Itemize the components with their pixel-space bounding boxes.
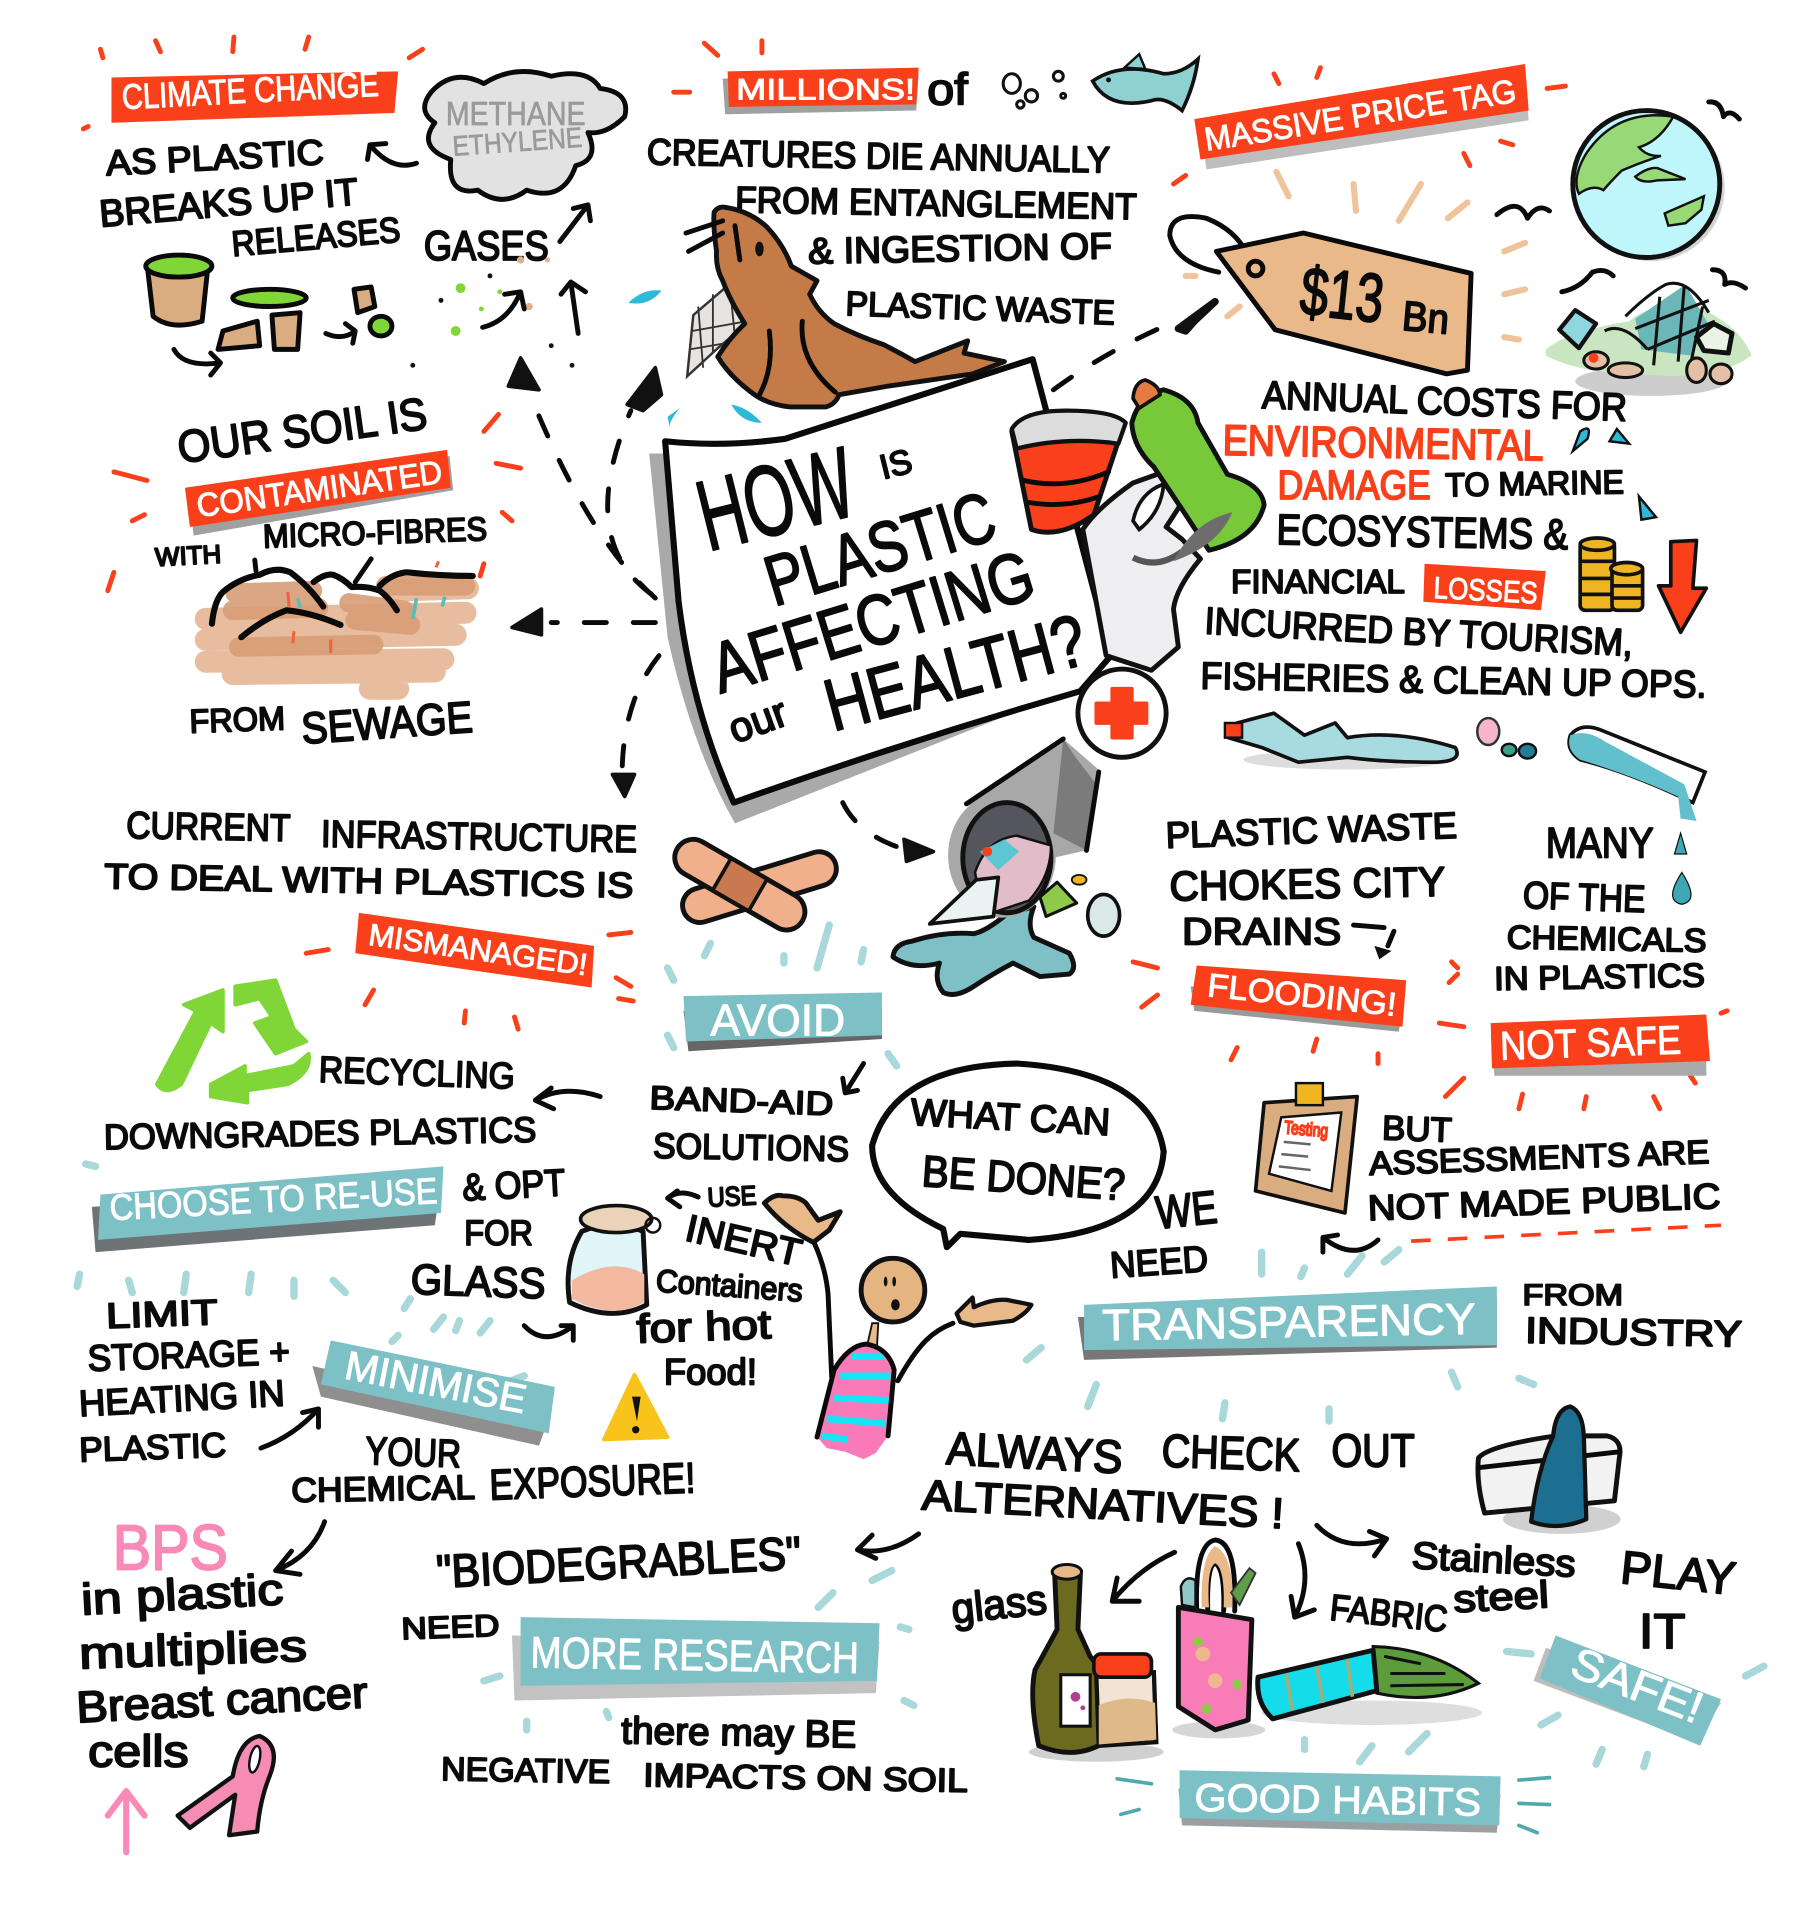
icon: fish and bubbles (1003, 54, 1198, 111)
panel: central title card (508, 358, 1264, 861)
icon: methane cloud (425, 72, 626, 199)
text: stainless steel (1411, 1535, 1577, 1621)
text: band-aid solutions: BAND-AID (649, 1080, 834, 1123)
icon: soil mound (206, 559, 473, 689)
tag: safe: SAFE! (1564, 1638, 1710, 1733)
text: limit storage and heating (78, 1292, 290, 1470)
arrow: pink up (108, 1791, 145, 1852)
icon: testing clipboard: Testing (1283, 1116, 1329, 1141)
icons: water drops (1573, 428, 1656, 520)
icon: plastic bag (1083, 462, 1200, 670)
text: annual costs: INCURRED BY TOURISM, (1204, 601, 1634, 665)
tag: more research (512, 1617, 879, 1700)
text: with micro-fibres: MICRO-FIBRES (262, 511, 488, 556)
text: of: of (927, 65, 969, 114)
tag: mismanaged: MISMANAGED! (367, 918, 590, 982)
text: in plastic multiplies breast cancer cells: in plastic (80, 1565, 284, 1625)
text: plastic waste chokes city drains: PLASTIC WASTE (1165, 805, 1458, 856)
text: with micro-fibres: WITH (154, 541, 222, 572)
icon: crossed plasters (668, 833, 841, 937)
arrow: limit to minimise (261, 1409, 318, 1448)
text: recycling downgrades plastics (104, 1049, 537, 1157)
arrow: center to infrastructure (612, 656, 659, 796)
panel: price tag (1053, 64, 1752, 821)
text: creatures die annually: CREATURES DIE ANNUALLY (647, 131, 1110, 180)
panel: alternatives (401, 1406, 1738, 1833)
text: we need (1109, 1181, 1220, 1286)
text: limit storage and heating: STORAGE + (87, 1331, 290, 1379)
panel: what can be done (764, 1064, 1742, 1459)
arrow: red down (1659, 540, 1706, 632)
icon: plastic waste pile (1546, 283, 1752, 396)
text: annual costs: FINANCIAL (1231, 564, 1405, 601)
icon: testing clipboard (1256, 1083, 1357, 1213)
text: glass: glass (949, 1576, 1049, 1632)
arrow: to stainless steel (1317, 1525, 1387, 1556)
text: recycling downgrades plastics: DOWNGRADES PLASTICS (104, 1110, 537, 1157)
text: creatures die annually: & INGESTION OF (808, 225, 1112, 272)
text: play it: IT (1639, 1605, 1685, 1659)
text: your chemical exposure (291, 1430, 696, 1510)
text: with micro-fibres (154, 511, 488, 572)
panel: drains and plasters (668, 739, 1721, 1252)
text: from sewage: SEWAGE (300, 693, 474, 754)
arrow: center to gases (508, 358, 655, 598)
text: from sewage: FROM (189, 700, 286, 741)
text: as plastic breaks up it releases gases: RELEASES (230, 210, 402, 264)
speech bubble: WHAT CAN (910, 1092, 1111, 1144)
icon: birds (1497, 102, 1746, 292)
icon: methane cloud: ETHYLENE (451, 121, 583, 162)
tag: massive price tag: MASSIVE PRICE TAG (1202, 73, 1519, 159)
text: opt for glass: FOR (464, 1213, 533, 1253)
heading: our soil is: OUR SOIL IS (174, 388, 430, 473)
arrow: center to drain pipe (843, 803, 933, 861)
arrow: to clipboard (1323, 1225, 1721, 1252)
text: creatures die annually: FROM ENTANGLEMENT (735, 179, 1137, 227)
title: how is plastic affecting our health: our (722, 688, 793, 752)
text: from industry (1523, 1279, 1742, 1355)
text: in plastic multiplies breast cancer cells: Breast cancer (75, 1668, 369, 1732)
text: use inert containers for hot food: INERT (681, 1208, 806, 1275)
text: your chemical exposure: CHEMICAL (291, 1469, 475, 1510)
arrow: center to seal (608, 368, 661, 594)
text: use inert containers for hot food (636, 1180, 806, 1392)
tag: avoid (684, 992, 882, 1051)
tag: flooding: FLOODING! (1206, 967, 1398, 1024)
text: from sewage (189, 693, 474, 754)
text: from industry: FROM (1523, 1279, 1623, 1312)
panel: climate change (98, 64, 626, 375)
text: we need: WE (1153, 1181, 1220, 1239)
icon: person (764, 1195, 1031, 1459)
arrow: exposure to BPS (276, 1522, 325, 1574)
icon: price tag 13 Bn: $13 (1297, 252, 1388, 337)
icon: green bottle (1132, 380, 1264, 561)
icon: lunchbox and flask (1478, 1406, 1621, 1534)
arrow: to glass (1112, 1552, 1175, 1601)
text: current infrastructure: TO DEAL WITH PLASTICS IS (104, 856, 634, 906)
tag: avoid: AVOID (710, 996, 845, 1045)
icon: dropper (1569, 727, 1705, 821)
text: annual costs: FISHERIES & CLEAN UP OPS. (1200, 656, 1707, 707)
icon: rolled veggies (1258, 1647, 1482, 1725)
text: there may be negative impacts on soil: there may BE (621, 1710, 857, 1756)
text: stainless steel: steel (1452, 1574, 1550, 1621)
text: always check out alternatives: ALTERNATIVES ! (921, 1471, 1285, 1538)
speech bubble (872, 1064, 1164, 1247)
text: there may be negative impacts on soil (441, 1710, 968, 1800)
text: need: NEED (401, 1609, 500, 1646)
text: your chemical exposure: YOUR (365, 1430, 462, 1476)
text: as plastic breaks up it releases gases: AS PLASTIC (105, 132, 325, 183)
text: annual costs: ANNUAL COSTS FOR (1261, 374, 1628, 430)
tag: more research: MORE RESEARCH (530, 1628, 859, 1683)
text: but assessments are not made public: NOT MADE PUBLIC (1367, 1176, 1721, 1228)
text: band-aid solutions (649, 1080, 849, 1169)
text: annual costs: TO MARINE (1445, 464, 1624, 504)
tag: climate change: CLIMATE CHANGE (121, 64, 380, 117)
text: as plastic breaks up it releases gases: BREAKS UP IT (98, 171, 360, 236)
text: but assessments are not made public: ASSESSMENTS ARE (1368, 1134, 1710, 1183)
panel: recycling and re-use (92, 805, 882, 1392)
text: limit storage and heating: LIMIT (105, 1292, 218, 1336)
icon: globe (1573, 111, 1725, 261)
text: in plastic multiplies breast cancer cells (75, 1565, 369, 1777)
arrow: avoid to band-aid (843, 1064, 864, 1093)
icon: gold coins (1580, 538, 1643, 610)
text: annual costs: ENVIRONMENTAL (1222, 417, 1544, 470)
card (649, 359, 1111, 823)
arrow: drains to flooding (1354, 925, 1394, 959)
text: there may be negative impacts on soil: NEGATIVE (441, 1751, 610, 1791)
text: in plastic multiplies breast cancer cells: cells (88, 1728, 189, 1777)
title: how is plastic affecting our health: IS (876, 442, 916, 487)
icon: recycling symbol (157, 980, 309, 1103)
text: your chemical exposure: EXPOSURE! (489, 1454, 696, 1510)
icon: squashed plastic tube (1225, 713, 1536, 770)
text: opt for glass: GLASS (410, 1256, 546, 1308)
title: how is plastic affecting our health: AFFECTING (702, 536, 1044, 709)
title: how is plastic affecting our health: PLASTIC (756, 477, 1005, 622)
icon: fabric bag (1172, 1540, 1265, 1738)
text: many of the chemicals: OF THE (1522, 875, 1646, 921)
text: but assessments are not made public (1367, 1109, 1721, 1228)
text: many of the chemicals (1494, 820, 1707, 998)
tag: good habits (1178, 1770, 1501, 1833)
tag: transparency: TRANSPARENCY (1102, 1295, 1476, 1350)
text: recycling downgrades plastics: RECYCLING (318, 1049, 515, 1097)
speech bubble: BE DONE? (920, 1147, 1127, 1210)
text: always check out alternatives: OUT (1331, 1425, 1415, 1477)
text: creatures die annually (647, 131, 1137, 332)
text: as plastic breaks up it releases gases (98, 132, 549, 269)
text: play it (1618, 1541, 1738, 1659)
text: current infrastructure: INFRASTRUCTURE (321, 814, 637, 861)
text: many of the chemicals: CHEMICALS (1507, 919, 1707, 960)
icon: seal in net (686, 207, 1004, 407)
panel: soil (154, 388, 488, 754)
tag: contaminated: CONTAMINATED (194, 454, 445, 525)
tag: transparency (1078, 1286, 1497, 1360)
arrow: gases to cloud (367, 144, 590, 242)
text: use inert containers for hot food: USE (707, 1180, 757, 1213)
text: we need: NEED (1109, 1238, 1209, 1286)
text: stainless steel: Stainless (1411, 1535, 1577, 1586)
tag: millions (723, 68, 919, 114)
text: there may be negative impacts on soil: IMPACTS ON SOIL (643, 1757, 968, 1800)
tag: choose to re-use (92, 1166, 443, 1252)
tag: safe (1534, 1636, 1721, 1746)
text: annual costs (1200, 374, 1707, 707)
title: how is plastic affecting our health (686, 426, 1095, 752)
text: current infrastructure (104, 805, 637, 906)
icon: warning triangle (604, 1375, 668, 1440)
text: biodegrables: "BIODEGRABLES" (435, 1527, 802, 1598)
text: annual costs: ECOSYSTEMS & (1276, 506, 1569, 559)
text: current infrastructure: CURRENT (126, 805, 291, 850)
icon: red cup (1012, 411, 1126, 532)
text: opt for glass: & OPT (461, 1162, 566, 1210)
tag: choose to re-use: CHOOSE TO RE-USE (109, 1170, 438, 1228)
text: fabric: FABRIC (1328, 1587, 1449, 1640)
arrow: alternatives to biodegradables (857, 1534, 919, 1558)
panel: creatures (628, 54, 1198, 429)
icons: water drops (628, 290, 762, 429)
icon: price tag 13 Bn: Bn (1401, 292, 1451, 343)
tag: not safe: NOT SAFE (1499, 1017, 1682, 1069)
text: opt for glass (410, 1162, 566, 1308)
text: BPS: BPS (113, 1512, 228, 1583)
title: how is plastic affecting our health: HEALTH? (816, 598, 1095, 747)
text: in plastic multiplies breast cancer cells: multiplies (78, 1622, 308, 1679)
text: annual costs: DAMAGE (1278, 462, 1431, 508)
text: as plastic breaks up it releases gases: GASES (424, 222, 549, 269)
text: use inert containers for hot food: Food! (664, 1351, 757, 1392)
icon: bottle and jar (1029, 1564, 1164, 1762)
icon: price tag 13 Bn (1170, 217, 1471, 374)
title: how is plastic affecting our health: HOW (686, 426, 866, 573)
text: use inert containers for hot food: Containers (655, 1262, 804, 1309)
text: always check out alternatives (921, 1422, 1415, 1538)
text: plastic waste chokes city drains: DRAINS (1182, 912, 1341, 954)
text: limit storage and heating: HEATING IN (78, 1373, 286, 1424)
text: limit storage and heating: PLASTIC (79, 1426, 227, 1470)
text: plastic waste chokes city drains: CHOKES CITY (1169, 858, 1446, 910)
arrow: glass to jar (524, 1326, 573, 1340)
text: plastic waste chokes city drains (1165, 805, 1458, 954)
tag: millions: MILLIONS! (736, 73, 915, 106)
arrow: center to soil (512, 609, 655, 635)
arrow: gases rising (483, 282, 586, 333)
arrow: solutions to recycling (535, 1088, 600, 1109)
text: band-aid solutions: SOLUTIONS (653, 1126, 849, 1169)
tag: good habits: GOOD HABITS (1194, 1777, 1481, 1825)
text: but assessments are not made public: BUT (1381, 1109, 1453, 1150)
text: creatures die annually: PLASTIC WASTE (845, 285, 1116, 332)
arrow: to fabric (1291, 1544, 1314, 1617)
text: use inert containers for hot food: for hot (636, 1301, 772, 1352)
text: many of the chemicals: MANY (1546, 820, 1654, 868)
icons: chemical drops (1673, 833, 1691, 904)
icon: methane cloud: METHANE (446, 96, 586, 133)
icon: medical cross (1078, 669, 1166, 757)
icon: drain pipe spilling plastic (893, 739, 1120, 995)
icon: glass jar (568, 1206, 660, 1313)
tag: losses: LOSSES (1433, 571, 1539, 610)
icon: plastic tub breaking up (146, 255, 574, 375)
text: always check out alternatives: CHECK (1161, 1425, 1301, 1481)
tag: minimise: MINIMISE (341, 1342, 530, 1422)
text: play it: PLAY (1618, 1541, 1738, 1605)
panel: minimise exposure (75, 1292, 696, 1852)
text: many of the chemicals: IN PLASTICS (1494, 957, 1705, 998)
tag: minimise (312, 1340, 555, 1446)
icon: pink ribbon (178, 1736, 274, 1835)
text: from industry: INDUSTRY (1525, 1310, 1742, 1355)
text: always check out alternatives: ALWAYS (945, 1422, 1124, 1483)
arrow: center to price tag (1053, 302, 1215, 390)
